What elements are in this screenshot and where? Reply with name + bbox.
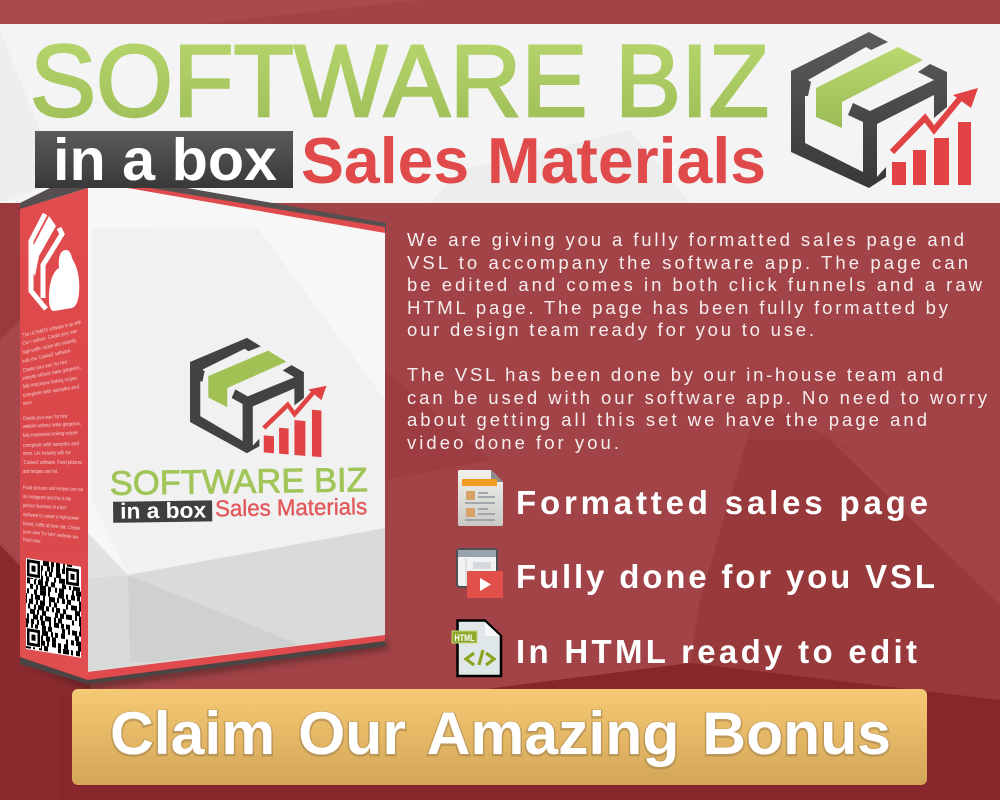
intro paragraph one: HTML page. The page has been fully formatted by <box>407 297 949 318</box>
box front face <box>88 188 385 672</box>
side description text: 'Cooked' software. Food pictures <box>23 460 82 466</box>
call to action button: Claim Our Amazing Bonus <box>110 700 891 767</box>
icon: video player window <box>457 549 503 598</box>
intro paragraph one: VSL to accompany the software app. The page can <box>407 252 968 273</box>
box front title <box>109 461 368 524</box>
QR finder marks <box>26 558 81 655</box>
intro paragraph one: our design team ready for you to use. <box>407 319 814 340</box>
title: SOFTWARE BIZ: SOFTWARE BIZ <box>30 24 769 138</box>
feature: formatted sales page <box>458 470 928 526</box>
side description text: brand, traffic all time site. Create <box>23 521 80 532</box>
side description text: Create your own 'for hire' <box>22 359 69 374</box>
box front title: in a box <box>120 497 207 524</box>
box top red stripe <box>128 188 385 233</box>
feature: formatted sales page: Formatted sales page <box>516 484 928 521</box>
intro paragraph two: The VSL has been done by our in-house team and <box>407 364 943 385</box>
side description text: more. <box>23 400 33 407</box>
box shadow <box>24 640 388 690</box>
call to action button: Claim Our Amazing Bonus <box>110 701 891 768</box>
box top edge <box>20 188 386 232</box>
intro paragraph one <box>407 229 983 340</box>
intro paragraph two <box>407 364 988 453</box>
side description text: Our I ve/ham. Create your own <box>22 328 78 347</box>
feature: done for you VSL <box>457 549 935 598</box>
side description text: hard now. <box>23 537 41 545</box>
subtitle: Sales Materials: Sales Materials <box>301 124 766 197</box>
logo: box with growth chart <box>791 32 978 188</box>
side description text: more. Life instantly with the <box>23 450 71 457</box>
side description text: The ULTIMATE software to go with <box>22 320 82 339</box>
icon: document page <box>458 470 503 526</box>
side description text: on Instagram and this is the <box>23 494 71 503</box>
header band <box>0 24 1000 203</box>
intro paragraph two: video done for you. <box>407 432 619 453</box>
side description text: website without make gorgeous, <box>23 421 81 430</box>
title badge: in a box: in a box <box>53 127 277 193</box>
side description text: high-traffic recipe site instantly <box>22 338 77 356</box>
intro paragraph one: We are giving you a fully formatted sales page and <box>407 229 964 250</box>
box bottom edge <box>20 641 386 684</box>
feature: done for you VSL: Fully done for you VSL <box>516 558 935 595</box>
intro paragraph one: be edited and comes in both click funnels and a raw <box>407 274 983 295</box>
side description text: your own 'for hire' website via <box>23 529 78 541</box>
feature: HTML ready to edit <box>452 620 917 676</box>
QR code <box>26 558 81 658</box>
side description text: fully responsive looking recipes <box>23 430 78 439</box>
side description text: perfect 'business in a box' <box>23 503 67 511</box>
product box <box>20 188 388 690</box>
side description text: with the 'Cooked' software. <box>22 348 72 365</box>
box front logo <box>190 333 327 460</box>
side description text: and recipes are hot. <box>23 469 58 475</box>
box bottom red stripe <box>88 635 385 680</box>
side description text: fully responsive looking recipes <box>22 375 78 390</box>
box front title: Sales Materials <box>215 493 367 521</box>
box side panel <box>20 188 88 680</box>
icon: html file: HTML <box>454 633 475 643</box>
side description text <box>22 320 84 545</box>
side description text: software to create a high-power <box>23 512 79 522</box>
side description text: complete with samples and <box>23 441 79 449</box>
intro paragraph two: can be used with our software app. No need to worry <box>407 387 988 408</box>
side description text: website without make gorgeous, <box>22 365 81 382</box>
side description text: complete with samples and <box>22 384 80 399</box>
side description text: Create your own 'for hire' <box>23 414 68 422</box>
box front title: SOFTWARE BIZ <box>109 461 368 503</box>
intro paragraph two: about getting all this set we have the page and <box>407 409 927 430</box>
side description text: Food pictures and recipes are hot <box>23 485 84 493</box>
feature: HTML ready to edit: In HTML ready to edit <box>516 633 917 670</box>
side icon: white box and cloud <box>31 214 79 311</box>
icon: html file <box>452 620 501 676</box>
call to action button <box>72 689 927 785</box>
